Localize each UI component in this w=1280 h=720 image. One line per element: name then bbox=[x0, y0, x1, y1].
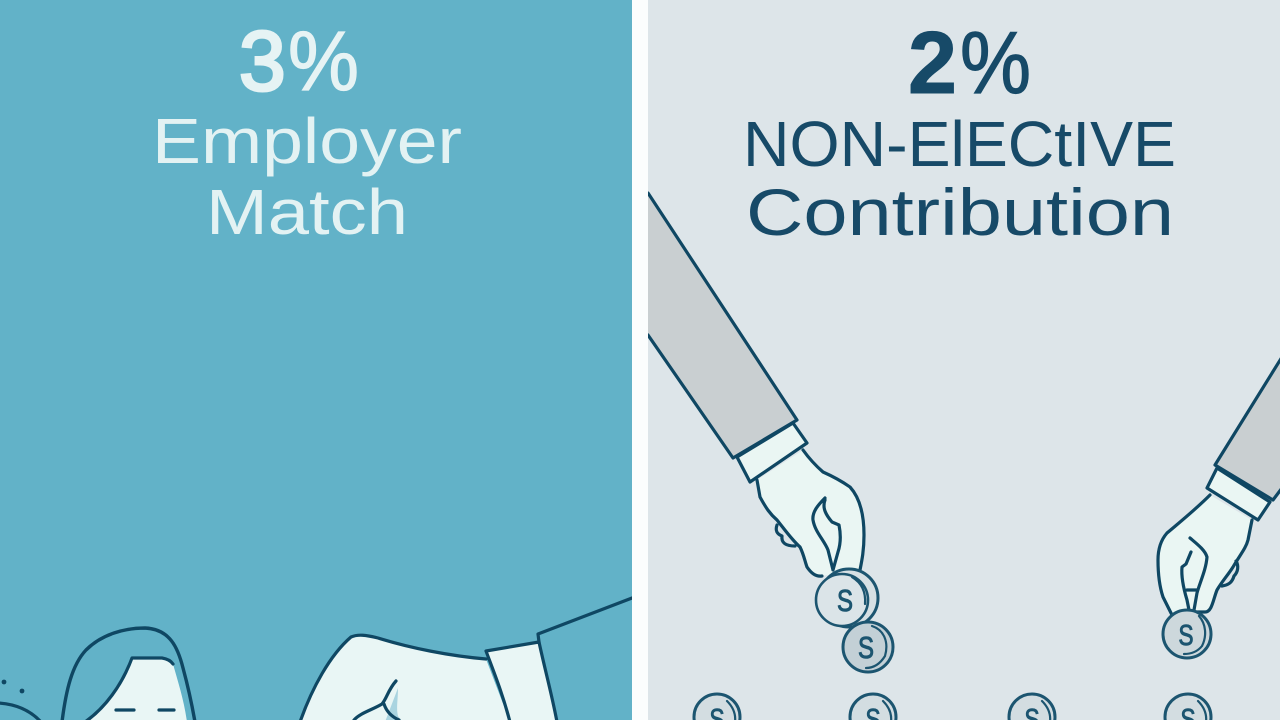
panel: non-elective contribution bbox=[648, 0, 1280, 720]
illustration: hand and cuff bbox=[300, 598, 632, 720]
heading: Contribution: Contribution bbox=[746, 175, 1174, 249]
icon: coin held: S bbox=[1178, 620, 1194, 652]
icon: fingers bbox=[1182, 538, 1238, 610]
icon: eyes bbox=[116, 708, 174, 712]
illustration: dots and shoulder bbox=[0, 680, 41, 720]
icon: thumb crease bbox=[354, 681, 402, 720]
row of coins bbox=[694, 694, 1211, 720]
coin 3 bbox=[1009, 694, 1055, 720]
icon: coin falling bbox=[843, 622, 893, 672]
illustration: left arm and hand bbox=[648, 193, 893, 672]
coin 1 bbox=[694, 694, 740, 720]
coin 2 bbox=[850, 694, 896, 720]
heading: 2%: % bbox=[960, 13, 1031, 112]
illustration: woman's head bbox=[62, 628, 195, 720]
icon: coin falling: S bbox=[858, 630, 874, 665]
heading: 3%: 3 bbox=[239, 14, 286, 108]
heading: NON-ElECtIVE: NON-ElECtIVE bbox=[743, 108, 1176, 180]
heading: 3%: % bbox=[288, 14, 359, 108]
heading: Match: Match bbox=[206, 176, 408, 248]
heading: 2%: 2 bbox=[908, 13, 957, 112]
heading: Employer: Employer bbox=[152, 105, 462, 177]
icon: fingers bbox=[776, 498, 840, 570]
illustration: right arm and hand bbox=[1158, 357, 1280, 658]
coin 4 bbox=[1165, 694, 1211, 720]
icon: coin held: S bbox=[837, 583, 853, 618]
icon: coin held bbox=[816, 569, 878, 627]
icon: coin held bbox=[1163, 610, 1211, 658]
panel: employer match bbox=[0, 0, 632, 720]
